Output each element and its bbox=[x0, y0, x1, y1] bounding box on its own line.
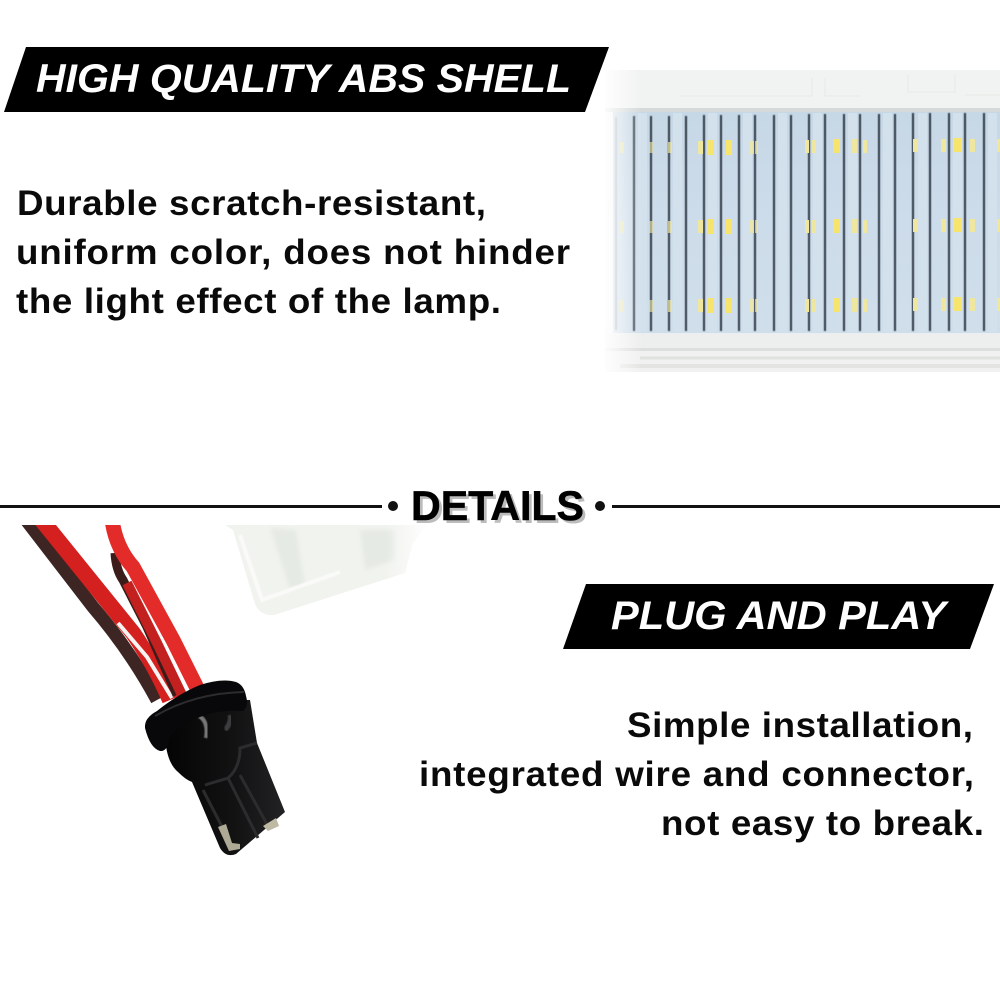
black wire, left bbox=[26, 520, 157, 700]
text block: shell description bbox=[16, 184, 570, 321]
stem ridges bbox=[203, 743, 268, 846]
text block: plug and play description: Simple installation, bbox=[627, 706, 973, 745]
heading banner: high quality ABS shell bbox=[4, 47, 609, 112]
metal contacts bbox=[218, 824, 240, 851]
socket dome and stem bbox=[165, 700, 285, 855]
text block: plug and play description: not easy to break. bbox=[661, 804, 984, 843]
heading banner: plug and play bbox=[563, 584, 994, 649]
dark red wire, middle bbox=[127, 583, 182, 695]
LED chips: bottom row bbox=[620, 297, 1000, 313]
heading banner: plug and play: PLUG AND PLAY bbox=[611, 594, 949, 638]
lamp photo: faded shell behind connector bbox=[225, 525, 430, 615]
socket flange bbox=[145, 681, 247, 751]
dark slits between LED strips bbox=[616, 113, 984, 331]
section divider: details bbox=[0, 482, 1000, 532]
black wire, right bbox=[115, 553, 177, 695]
dome highlights bbox=[197, 715, 207, 738]
text block: shell description: the light effect of the lamp. bbox=[16, 282, 501, 321]
LED chips: middle row bbox=[620, 218, 1000, 234]
text block: plug and play description bbox=[419, 706, 984, 843]
red wire, right bbox=[112, 520, 198, 690]
white wire bbox=[118, 623, 172, 698]
heading banner: high quality ABS shell: HIGH QUALITY ABS SHELL bbox=[36, 57, 571, 101]
connector photo: wires and T10 bulb socket bbox=[26, 518, 285, 855]
section divider: details: DETAILS bbox=[411, 482, 584, 529]
section divider: details: DETAILS bbox=[414, 485, 587, 532]
red wire, left bbox=[40, 518, 170, 700]
LED chips: top row bbox=[620, 138, 1000, 155]
text block: shell description: uniform color, does not hinder bbox=[16, 233, 570, 272]
light streaks between slits bbox=[638, 113, 997, 332]
lamp photo: LED panel bbox=[600, 65, 1000, 377]
text block: shell description: Durable scratch-resistant, bbox=[17, 184, 486, 223]
text block: plug and play description: integrated wire and connector, bbox=[419, 755, 974, 794]
